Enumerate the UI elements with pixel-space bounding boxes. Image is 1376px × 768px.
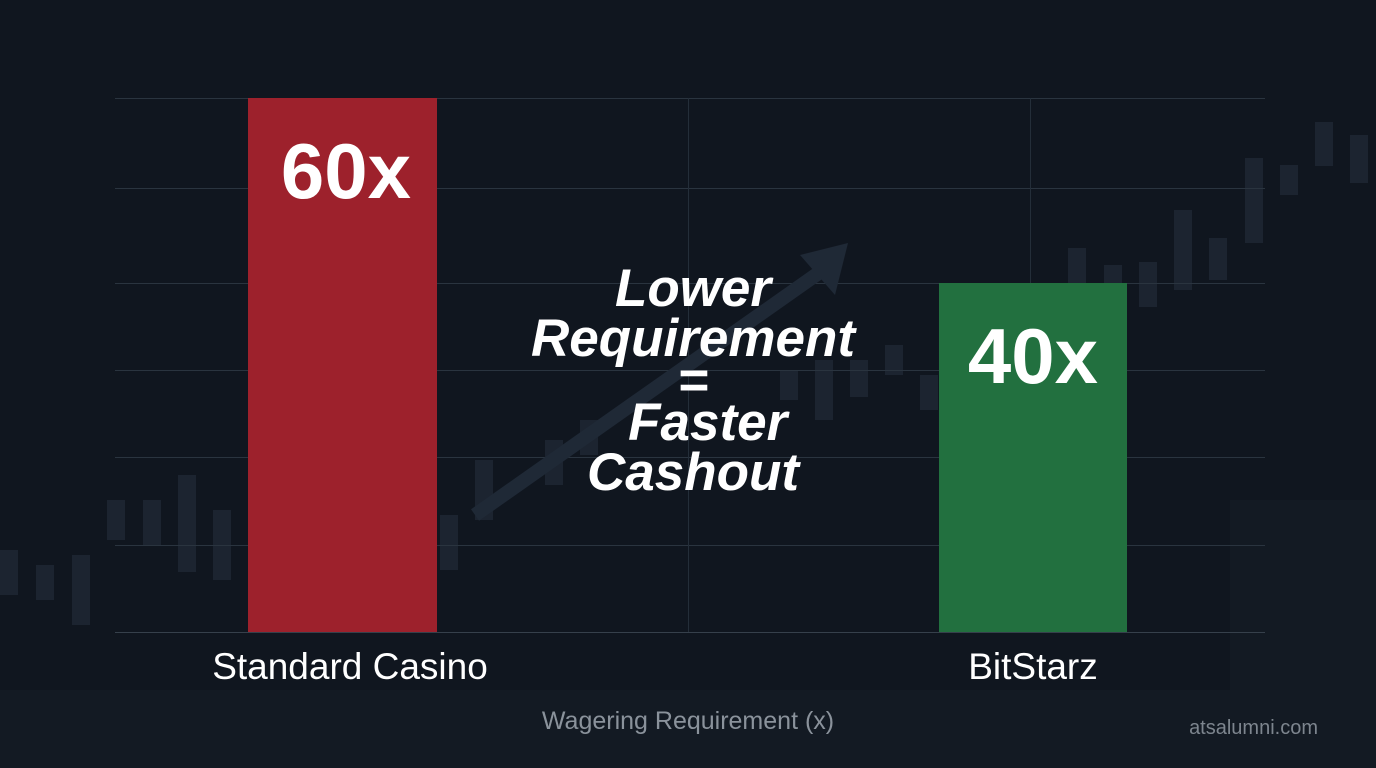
x label: Standard Casino: Standard Casino [212,646,488,687]
callout: lower requirement = faster cashout: Cashout [587,443,799,502]
arrow: trend [471,243,848,520]
value label 40x: 40x [968,312,1098,400]
watermark: atsalumni.com [1189,717,1318,739]
callout: lower requirement = faster cashout: Lower [615,259,771,318]
axis title: Wagering Requirement (x) [542,707,834,735]
x label: BitStarz: BitStarz [968,646,1098,687]
callout: lower requirement = faster cashout: Requirement [531,309,855,368]
callout: lower requirement = faster cashout [531,259,857,502]
bar: BitStarz 40x [939,283,1127,632]
grid lines [115,98,1265,99]
callout: lower requirement = faster cashout: Faster [628,393,787,452]
value label 60x: 60x [281,127,411,215]
bar: standard casino 60x [248,98,437,632]
callout: lower requirement = faster cashout: = [678,351,708,410]
